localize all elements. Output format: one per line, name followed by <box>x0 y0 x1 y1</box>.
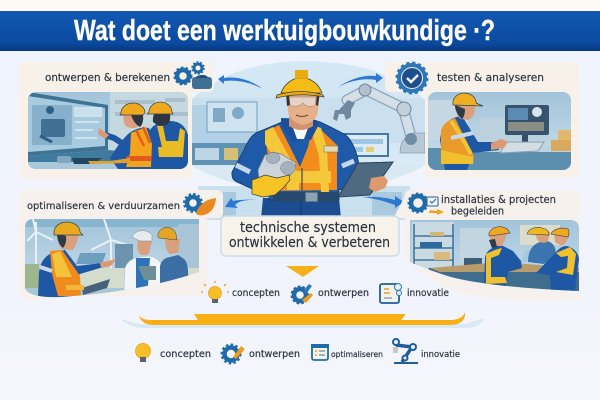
worker right <box>150 121 190 169</box>
hand <box>369 176 388 192</box>
trousers <box>261 198 341 218</box>
central label box: ontwikkelen & verbeteren <box>229 235 390 251</box>
hard hat <box>281 78 322 93</box>
icon: gear with pencil <box>292 284 313 304</box>
glove <box>252 175 290 197</box>
header band <box>0 11 600 51</box>
heading: testen & analyseren <box>437 72 544 84</box>
icon: checklist board <box>380 284 402 303</box>
panel: testen & analyseren <box>385 62 579 178</box>
worker centre <box>124 256 161 290</box>
panel: ontwerpen & berekenen <box>19 62 214 179</box>
icon: gear with pencil <box>222 344 245 364</box>
arrow: to installaties <box>362 196 404 208</box>
collar and shirt <box>281 118 319 142</box>
arrow: to testen <box>338 73 383 87</box>
safety glasses <box>289 97 316 106</box>
belt <box>273 192 338 202</box>
title: Wat doet een werktuigbouwkundige ·? <box>74 15 495 47</box>
worker left <box>484 246 522 286</box>
torso and arms <box>232 118 360 200</box>
neck and face <box>289 108 313 130</box>
panel: installaties & projecten begeleiden <box>394 190 581 301</box>
label: concepten <box>160 349 211 360</box>
worker left <box>110 128 154 169</box>
label: innovatie <box>407 288 449 299</box>
label: optimaliseren <box>331 350 383 359</box>
panel: optimaliseren & verduurzamen <box>19 190 223 300</box>
central label box: technische systemen <box>240 220 376 236</box>
icon: robot arm <box>393 339 418 364</box>
icon: gear with leaf <box>184 194 216 215</box>
icon: gear with checklist <box>408 194 444 215</box>
image: engineer at console <box>428 92 571 170</box>
icon: gear with check <box>397 63 427 93</box>
heading: ontwerpen & berekenen <box>45 72 170 84</box>
label: innovatie <box>421 350 460 360</box>
image: engineers at wind farm <box>25 219 200 300</box>
label: ontwerpen <box>249 349 300 360</box>
icon row 1 <box>201 281 449 304</box>
icon row 2 <box>136 339 460 364</box>
arrow: to ontwerpen <box>218 75 263 89</box>
icon: light bulb <box>136 344 150 362</box>
worker right <box>160 255 188 283</box>
central label box <box>221 216 399 256</box>
central backdrop scene <box>190 61 425 220</box>
downward triangle <box>286 266 319 277</box>
heading: begeleiden <box>451 206 504 218</box>
label: concepten <box>232 288 280 299</box>
image: team in warehouse <box>410 220 579 295</box>
worker middle <box>528 241 556 264</box>
icon: light bulb with rays <box>201 281 229 303</box>
main figure: engineer <box>232 70 393 218</box>
heading: installaties & projecten <box>441 194 556 206</box>
orange ribbon <box>120 312 485 328</box>
arrow: to optimaliseren <box>225 198 259 208</box>
vest <box>265 125 337 191</box>
tablet <box>338 162 393 197</box>
icon: robot arm <box>333 84 425 153</box>
heading: optimaliseren & verduurzamen <box>27 201 180 212</box>
label: ontwerpen <box>318 288 369 299</box>
rolled drawings <box>258 152 296 186</box>
icon: calendar checklist <box>311 344 329 360</box>
icon: gears and toolbox <box>174 62 212 89</box>
image: engineers at monitor <box>28 92 190 169</box>
worker right <box>536 246 579 291</box>
worker left <box>38 250 101 297</box>
